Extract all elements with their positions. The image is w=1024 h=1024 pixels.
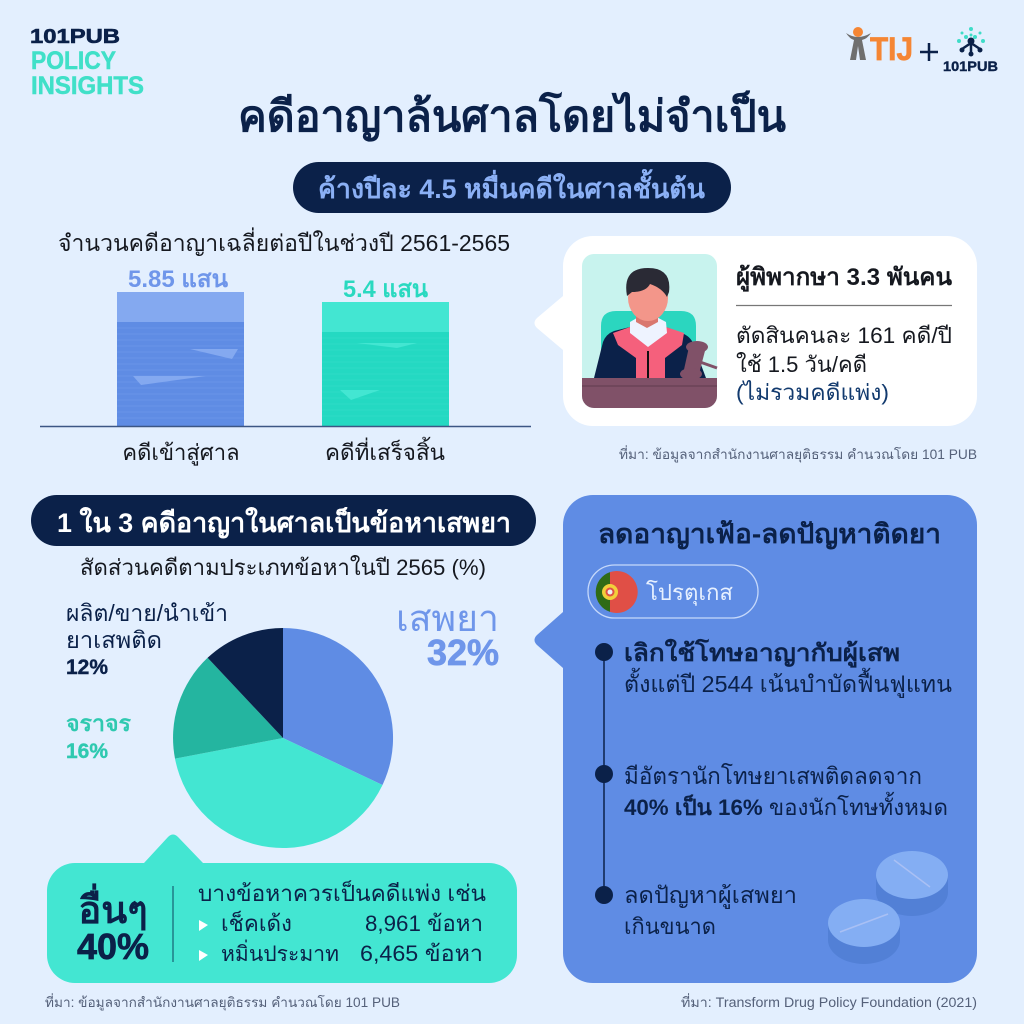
country pill: Portugal: โปรตุเกส bbox=[646, 580, 734, 606]
logo: TIJ and 101PUB: 101PUB bbox=[943, 58, 998, 74]
timeline: เลิกใช้โทษอาญากับผู้เสพ bbox=[624, 638, 900, 668]
pie label: drug use: เสพยา bbox=[396, 598, 499, 639]
bar: completed cases: คดีที่เสร็จสิ้น bbox=[325, 437, 445, 465]
panel: judges callout bbox=[534, 236, 977, 426]
bar: incoming cases bbox=[117, 266, 244, 466]
country pill: Portugal bbox=[588, 565, 758, 618]
callout: other 40%: 6,465 ข้อหา bbox=[360, 941, 483, 966]
chart heading: จำนวนคดีอาญาเฉลี่ยต่อปีในช่วงปี 2561-2565 bbox=[58, 227, 510, 256]
logo: 101PUB Policy Insights bbox=[30, 26, 144, 100]
judges text: ใช้ 1.5 วัน/คดี bbox=[736, 352, 867, 377]
pie label: traffic bbox=[66, 711, 131, 763]
logo: 101PUB Policy Insights: 101PUB bbox=[30, 26, 120, 48]
panel: Portugal case bbox=[534, 495, 977, 983]
pie label: production and sale: ผลิต/ขาย/นำเข้า bbox=[66, 600, 228, 626]
callout: other 40%: 40% bbox=[77, 926, 149, 967]
judges text: ตัดสินคนละ 161 คดี/ปี bbox=[736, 323, 952, 348]
pie label: production and sale: ยาเสพติด bbox=[66, 627, 162, 653]
callout: other 40%: บางข้อหาควรเป็นคดีแพ่ง เช่น bbox=[198, 879, 486, 906]
pie label: drug use: 32% bbox=[427, 632, 499, 673]
source: court data 2565: ที่มา: ข้อมูลจากสำนักงานศาลยุติธรรม คำนวณโดย 101 PUB bbox=[45, 993, 400, 1011]
source: Transform Drug Policy Foundation: ที่มา: Transform Drug Policy Foundation (2021) bbox=[681, 993, 977, 1010]
pie label: production and sale: 12% bbox=[66, 656, 108, 679]
logo: 101PUB Policy Insights: INSIGHTS bbox=[31, 72, 144, 100]
bar: completed cases: 5.4 แสน bbox=[343, 276, 429, 303]
panel heading: ลดอาญาเฟ้อ-ลดปัญหาติดยา bbox=[598, 519, 941, 550]
heading pill: backlog per year: ค้างปีละ 4.5 หมื่นคดีในศาลชั้นต้น bbox=[318, 168, 706, 204]
callout: other 40%: หมิ่นประมาท bbox=[221, 939, 339, 966]
timeline: เกินขนาด bbox=[624, 914, 716, 939]
title: คดีอาญาล้นศาลโดยไม่จำเป็น bbox=[238, 90, 787, 142]
callout: other 40%: อื่นๆ bbox=[78, 883, 148, 932]
pie chart: case share by charge bbox=[173, 628, 393, 848]
heading pill: backlog per year bbox=[293, 162, 731, 213]
logo: 101PUB Policy Insights: POLICY bbox=[31, 47, 116, 75]
pie label: production and sale bbox=[66, 600, 228, 679]
callout: other 40%: เช็คเด้ง bbox=[221, 909, 292, 936]
timeline bbox=[595, 638, 952, 939]
icon: pills bbox=[828, 851, 948, 964]
bar chart: average criminal cases per year bbox=[40, 227, 531, 466]
timeline: มีอัตรานักโทษยาเสพติดลดจาก bbox=[624, 763, 922, 789]
heading pill: one in three cases bbox=[31, 495, 536, 546]
pie chart heading: สัดส่วนคดีตามประเภทข้อหาในปี 2565 (%) bbox=[80, 555, 486, 580]
judges text: ผู้พิพากษา 3.3 พันคน bbox=[736, 264, 953, 292]
icon: bullet arrow bbox=[199, 920, 208, 931]
bar: completed cases bbox=[322, 276, 449, 465]
callout: other 40% bbox=[47, 834, 517, 983]
source: court data: ที่มา: ข้อมูลจากสำนักงานศาลยุติธรรม คำนวณโดย 101 PUB bbox=[619, 445, 977, 463]
judges text: (ไม่รวมคดีแพ่ง) bbox=[736, 380, 889, 405]
heading pill: one in three cases: 1 ใน 3 คดีอาญาในศาลเป็นข้อหาเสพยา bbox=[57, 505, 511, 539]
judges text bbox=[736, 264, 953, 405]
timeline: 40% เป็น 16% ของนักโทษทั้งหมด bbox=[624, 792, 948, 820]
pie label: traffic: 16% bbox=[66, 740, 108, 763]
pie label: drug use bbox=[396, 598, 499, 673]
bar: incoming cases: 5.85 แสน bbox=[128, 266, 229, 293]
timeline: ลดปัญหาผู้เสพยา bbox=[624, 882, 797, 909]
pie label: traffic: จราจร bbox=[66, 711, 131, 736]
icon: gavel bbox=[680, 341, 708, 380]
icon: judge illustration bbox=[582, 254, 717, 408]
callout: other 40%: 8,961 ข้อหา bbox=[365, 911, 483, 936]
logo: TIJ and 101PUB bbox=[846, 27, 998, 74]
logo: TIJ and 101PUB: TIJ bbox=[870, 31, 913, 67]
icon: bullet arrow bbox=[199, 950, 208, 961]
bar: incoming cases: คดีเข้าสู่ศาล bbox=[122, 440, 240, 466]
timeline: ตั้งแต่ปี 2544 เน้นบำบัดฟื้นฟูแทน bbox=[624, 668, 952, 698]
